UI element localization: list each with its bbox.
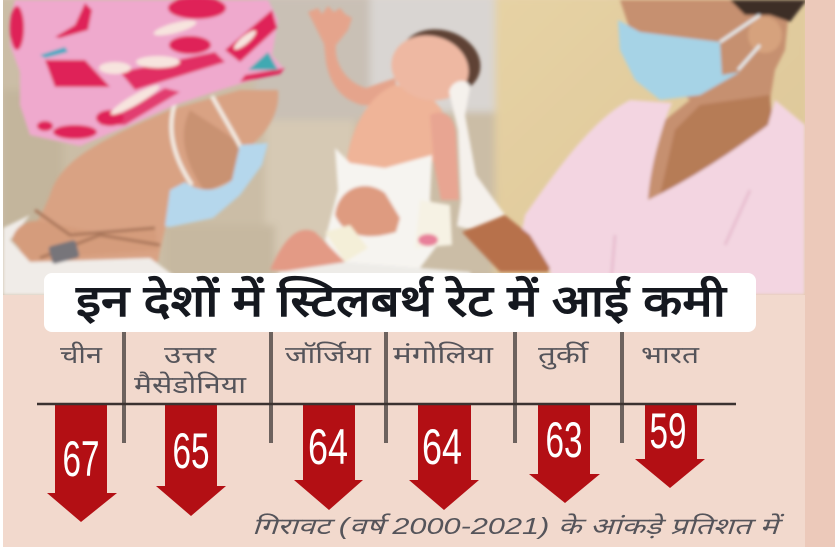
hair <box>730 0 807 22</box>
baseline <box>37 403 736 405</box>
footnote: गिरावट (वर्ष 2000-2021) के आंकड़े प्रतिशत में <box>252 513 785 539</box>
right side band <box>805 0 835 547</box>
country labels: चीन <box>60 341 103 369</box>
arrow: Georgia 64: 64 <box>308 419 348 475</box>
head wrap light stripes <box>99 17 258 118</box>
pink shirt <box>520 100 805 295</box>
country labels: उत्तर <box>164 342 218 369</box>
head back hair <box>406 26 483 88</box>
country labels: भारत <box>641 342 701 369</box>
arrow: North Macedonia 65: 65 <box>172 423 210 479</box>
country labels: मैसेडोनिया <box>134 371 247 399</box>
title banner <box>44 273 756 332</box>
shirt fold <box>610 190 751 273</box>
diaper <box>325 148 445 270</box>
newborn baby <box>265 6 505 295</box>
photo: nurses holding newborn <box>0 0 810 300</box>
country labels: जॉर्जिया <box>285 341 372 369</box>
arrow: China 67 <box>47 404 117 522</box>
left woman <box>3 0 285 295</box>
arrow: Turkey 63: 63 <box>546 412 582 468</box>
country labels: मंगोलिया <box>393 341 494 369</box>
arrow: Georgia 64 <box>294 404 363 510</box>
raised arm <box>308 6 400 108</box>
right woman <box>462 0 807 295</box>
arrow: North Macedonia 65 <box>156 404 226 516</box>
bedding <box>278 260 472 273</box>
left margin <box>0 0 3 547</box>
face and neck <box>620 0 790 200</box>
arrow: Mongolia 64 <box>409 404 479 510</box>
ear <box>748 17 782 53</box>
ankle bands <box>325 225 368 262</box>
thigh <box>335 186 400 236</box>
title box <box>44 273 756 332</box>
column dividers <box>124 332 622 443</box>
photo background walls <box>0 0 810 300</box>
forearm <box>462 215 550 272</box>
head wrap <box>10 0 285 146</box>
head wrap pattern <box>10 0 285 139</box>
head face <box>390 32 472 102</box>
lower leg <box>270 230 345 272</box>
neck and face <box>10 90 278 268</box>
arrow: Turkey 63 <box>529 404 600 503</box>
baby arm <box>430 112 459 200</box>
necklace <box>35 210 160 258</box>
mask straps <box>171 96 242 185</box>
country labels: तुर्की <box>538 341 590 370</box>
arrow: India 59 <box>635 403 705 488</box>
blue mask <box>165 143 268 227</box>
title text: इन देशों में स्टिलबर्थ रेट में आई कमी <box>75 275 728 326</box>
blue mask <box>618 20 740 100</box>
shoulder robe <box>3 214 173 295</box>
arrow: Mongolia 64: 64 <box>422 419 462 475</box>
country labels <box>60 341 701 399</box>
glove and sleeve <box>449 81 505 232</box>
torso <box>346 85 442 170</box>
arrow: India 59: 59 <box>650 403 686 459</box>
arrow: China 67: 67 <box>62 431 100 487</box>
chart: stillbirth rate decline by country <box>37 332 736 522</box>
head wrap teal patch <box>248 52 278 70</box>
